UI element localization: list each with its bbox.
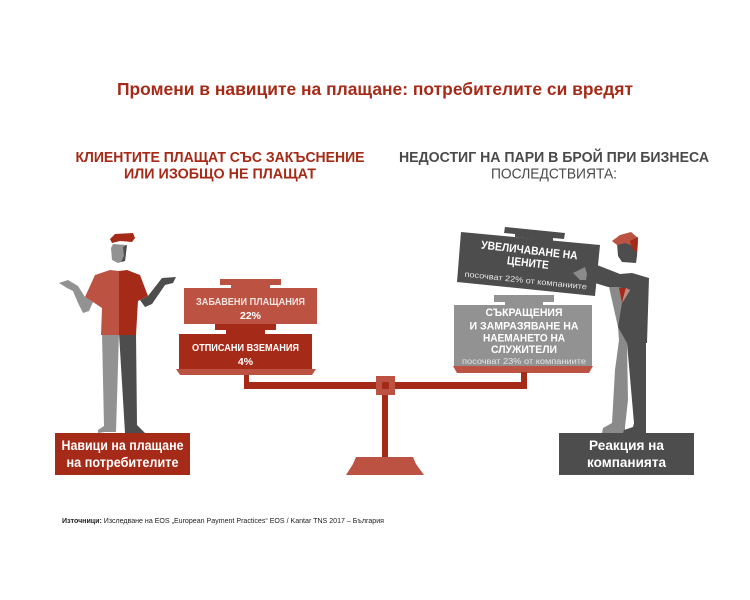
weight: layoffs and hiring freeze: НАЕМАНЕТО НА bbox=[483, 332, 565, 344]
title: Промени в навиците на плащане: потребителите си вредят bbox=[117, 79, 633, 99]
weight: layoffs and hiring freeze: посочват 23% от компаниите bbox=[462, 357, 587, 366]
heading: customers: КЛИЕНТИТЕ ПЛАЩАТ СЪС ЗАКЪСНЕНИЕ bbox=[76, 150, 365, 166]
weight: delayed payments bbox=[184, 279, 317, 324]
heading: business bbox=[399, 148, 710, 182]
label: company reaction: компанията bbox=[587, 455, 666, 470]
heading: customers: ИЛИ ИЗОБЩО НЕ ПЛАЩАТ bbox=[124, 166, 316, 182]
weight: price increases: ЦЕНИТЕ bbox=[506, 255, 550, 272]
weight: layoffs and hiring freeze bbox=[454, 295, 592, 366]
weight: price increases bbox=[457, 227, 606, 296]
label: company reaction: Реакция на bbox=[589, 438, 664, 453]
figure: customer bbox=[59, 233, 176, 433]
weight: delayed payments: 22% bbox=[240, 310, 262, 322]
label: customer habits: на потребителите bbox=[66, 455, 179, 470]
heading: customers bbox=[76, 150, 365, 182]
source note: Източници: Изследване на EOS „European Payment Practices“ EOS / Kantar TNS 2017 – България bbox=[62, 518, 384, 525]
weight: layoffs and hiring freeze: И ЗАМРАЗЯВАНЕ НА bbox=[470, 320, 579, 332]
weight: written-off receivables: 4% bbox=[238, 356, 254, 368]
label: customer habits: Навици на плащане bbox=[62, 438, 184, 453]
weight: layoffs and hiring freeze: СЪКРАЩЕНИЯ bbox=[486, 307, 563, 319]
figure: company representative bbox=[595, 232, 649, 433]
weight: written-off receivables bbox=[179, 324, 312, 369]
weight: layoffs and hiring freeze: СЛУЖИТЕЛИ bbox=[491, 344, 557, 356]
weight: price increases: УВЕЛИЧАВАНЕ НА bbox=[480, 240, 578, 262]
weight: written-off receivables: ОТПИСАНИ ВЗЕМАНИЯ bbox=[192, 343, 299, 354]
heading: business: ПОСЛЕДСТВИЯТА: bbox=[491, 166, 617, 182]
heading: business: НЕДОСТИГ НА ПАРИ В БРОЙ ПРИ БИЗНЕСА bbox=[399, 148, 710, 166]
scale bbox=[176, 366, 593, 475]
weight: delayed payments: ЗАБАВЕНИ ПЛАЩАНИЯ bbox=[196, 297, 305, 308]
label: customer habits bbox=[55, 433, 190, 475]
label: company reaction bbox=[559, 433, 694, 475]
weight: price increases: посочват 22% от компаниите bbox=[464, 270, 588, 291]
